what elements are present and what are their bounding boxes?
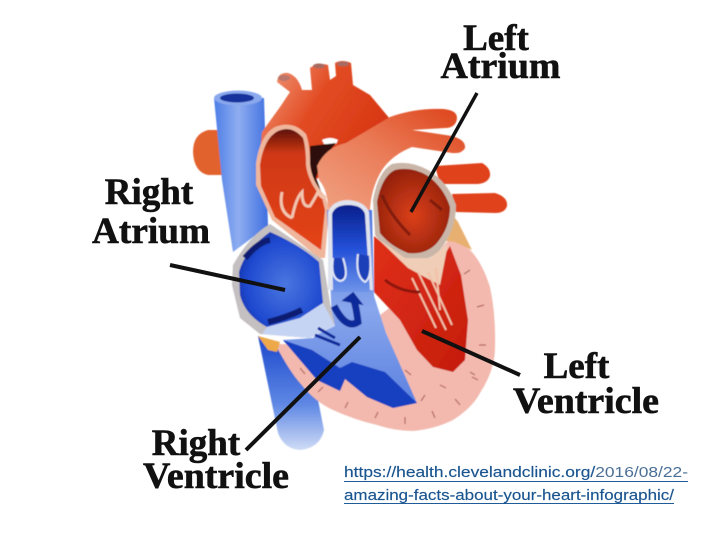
aortic arch with branches bbox=[258, 61, 395, 190]
pointer line: Left Atrium bbox=[411, 93, 477, 212]
pulmonary artery bbox=[317, 109, 465, 210]
left ventricle chamber bbox=[374, 236, 468, 372]
tricuspid valve and arrow bbox=[315, 294, 360, 345]
source link: https://health.clevelandclinic.org/ 2016/08/22- bbox=[344, 465, 688, 481]
source link bbox=[344, 465, 688, 504]
vessels: pulmonary veins bbox=[435, 163, 507, 213]
label: Left Ventricle bbox=[513, 346, 659, 422]
label: Left Ventricle: Left bbox=[544, 346, 610, 387]
label: Right Ventricle bbox=[143, 423, 289, 497]
pointer line: Right Ventricle bbox=[246, 337, 360, 450]
source link: amazing-facts-about-your-heart-infographic/ bbox=[344, 488, 675, 504]
label: Left Atrium bbox=[440, 18, 561, 87]
label: Right Atrium bbox=[92, 172, 210, 252]
vessel: inferior vena cava bbox=[258, 336, 324, 450]
right ventricle chamber bbox=[283, 210, 417, 408]
aorta chamber bbox=[256, 125, 329, 258]
pointer line: Right Atrium bbox=[170, 265, 285, 290]
opening under aortic arch bbox=[310, 138, 338, 194]
vessel: superior vena cava bbox=[214, 90, 268, 252]
pink myocardium bbox=[275, 238, 495, 431]
aortic valve bbox=[281, 192, 326, 218]
heart illustration bbox=[193, 61, 507, 450]
right atrium bbox=[232, 224, 335, 338]
pulmonary valves bbox=[332, 254, 370, 282]
chordae bbox=[412, 268, 452, 330]
orange fat near left atrium bbox=[440, 205, 472, 250]
vessel: left pulmonary artery stub bbox=[193, 130, 230, 175]
label: Right Ventricle: Right bbox=[152, 423, 241, 464]
label: Left Ventricle: Ventricle bbox=[513, 381, 659, 422]
orange fat patch bbox=[258, 336, 280, 352]
label: Left Atrium: Atrium bbox=[440, 46, 561, 87]
label: Right Ventricle: Ventricle bbox=[143, 456, 289, 497]
pulmonary trunk bbox=[328, 200, 373, 290]
pointer line: Left Ventricle bbox=[422, 331, 520, 375]
right ventricle dark lower portion bbox=[283, 340, 417, 408]
label: Right Atrium: Right bbox=[105, 172, 194, 213]
left atrium wall bbox=[373, 163, 456, 260]
myocardium fibres bbox=[300, 270, 486, 424]
label: Left Atrium: Left bbox=[463, 18, 530, 59]
left atrium chamber bbox=[377, 169, 450, 253]
pale band under left atrium bbox=[377, 238, 448, 285]
label: Right Atrium: Atrium bbox=[92, 211, 210, 252]
